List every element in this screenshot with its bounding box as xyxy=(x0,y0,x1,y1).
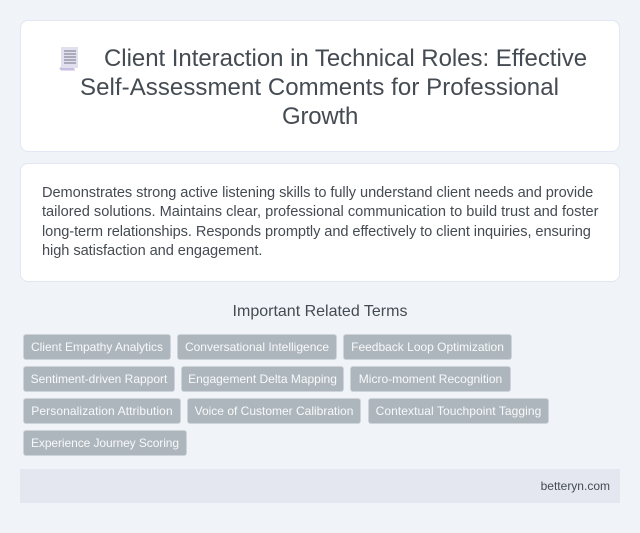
text block: summary: Demonstrates strong active listening skills to fully understand client needs and provide xyxy=(42,185,593,201)
tag xyxy=(23,430,187,456)
tag xyxy=(177,334,337,360)
title: Self-Assessment Comments for Professional xyxy=(80,74,559,101)
heading: related terms: Important Related Terms xyxy=(233,303,407,320)
tag xyxy=(187,398,361,424)
tag: Sentiment-driven Rapport xyxy=(31,372,167,386)
text block: summary: long-term relationships. Responds promptly and effectively to client inquiries, ensuring xyxy=(42,224,591,240)
text block: summary xyxy=(42,185,598,259)
tag list xyxy=(23,334,549,456)
tag: Conversational Intelligence xyxy=(185,340,329,354)
tag: Experience Journey Scoring xyxy=(31,436,179,450)
tag: Feedback Loop Optimization xyxy=(351,340,504,354)
panel: summary card xyxy=(20,163,620,282)
tag xyxy=(23,398,181,424)
title: Growth xyxy=(282,103,358,130)
tag xyxy=(23,334,171,360)
tag: Client Empathy Analytics xyxy=(31,340,163,354)
tag: Micro-moment Recognition xyxy=(359,372,502,386)
title xyxy=(80,45,587,130)
icon: document scroll xyxy=(59,47,78,70)
tag: Personalization Attribution xyxy=(31,404,173,418)
text block: summary: high satisfaction and engagement. xyxy=(42,243,262,259)
title: Client Interaction in Technical Roles: Effective xyxy=(104,45,587,72)
text block: summary: tailored solutions. Maintains clear, professional communication to build trust and foster xyxy=(42,204,598,220)
footer bar xyxy=(20,469,620,503)
tag xyxy=(368,398,549,424)
footer: source: betteryn.com xyxy=(541,479,610,493)
panel: title card xyxy=(20,20,620,152)
tag xyxy=(181,366,344,392)
tag: Contextual Touchpoint Tagging xyxy=(376,404,541,418)
tag xyxy=(350,366,511,392)
tag: Voice of Customer Calibration xyxy=(195,404,353,418)
tag xyxy=(23,366,175,392)
tag xyxy=(343,334,512,360)
tag: Engagement Delta Mapping xyxy=(188,372,337,386)
